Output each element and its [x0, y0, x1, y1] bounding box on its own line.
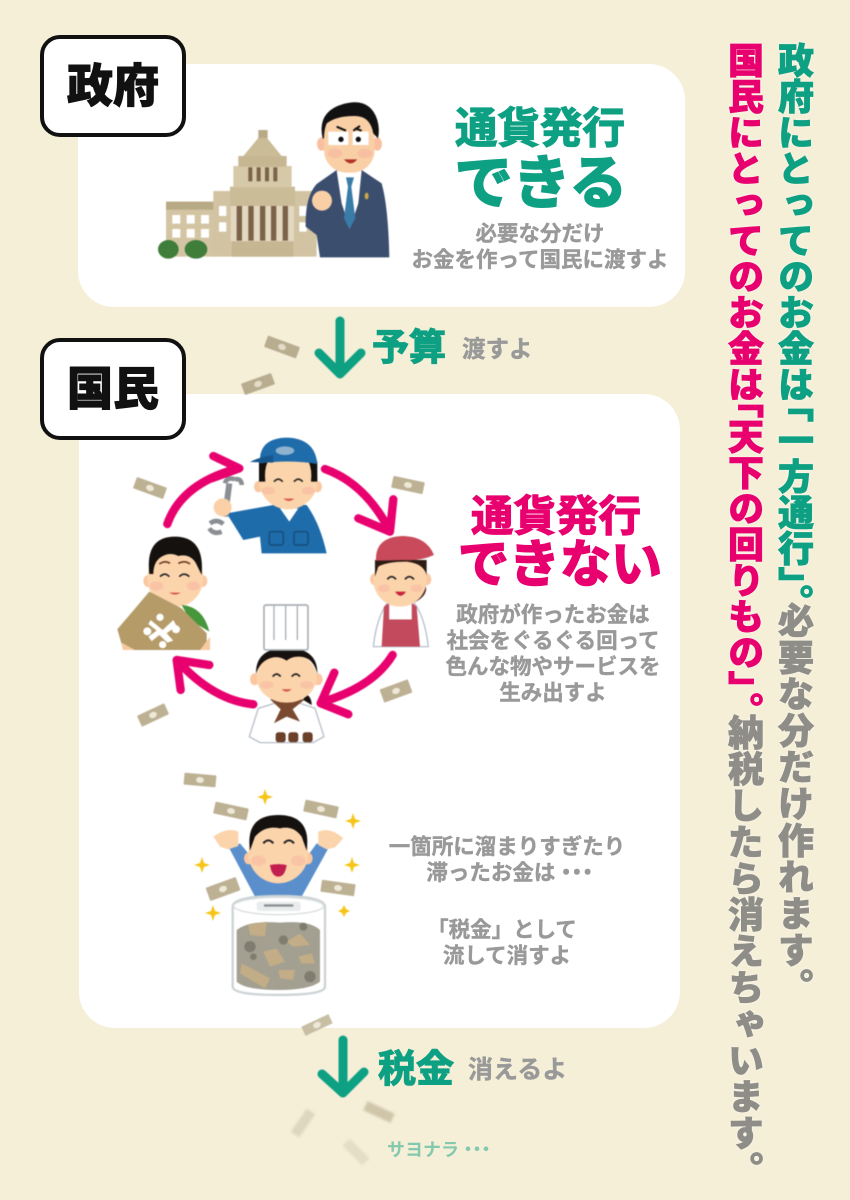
badge: government: 政府: [67, 60, 159, 112]
label: goodbye: サヨナラ・・・: [387, 1140, 486, 1160]
text: erase as tax: [427, 918, 577, 968]
icon: sparkles: [194, 789, 361, 921]
vertical text: citizens message: 国民にとってのお金は「 天下の回りもの 」。納税したら消えちゃいます。: [723, 42, 764, 1187]
text: government description: 必要な分だけ: [475, 222, 604, 246]
text: stagnant money: 滞ったお金は・・・: [426, 861, 588, 885]
text: erase as tax: 「税金」として: [427, 918, 577, 942]
vertical text: government message: 政府にとってのお金は「 一方通行 」。必要な分だけ作れます。: [773, 42, 814, 1005]
money bill: leaving panel: [301, 1014, 333, 1036]
text: government description: [412, 222, 668, 272]
label: hand over: 渡すよ: [462, 336, 532, 362]
icon: mechanic: [209, 438, 327, 553]
badge: citizens: 国民: [67, 363, 159, 415]
icon: politician: [306, 102, 389, 257]
text: money circulates: 社会をぐるぐる回って: [446, 629, 660, 653]
money bills: around jar: [184, 773, 356, 901]
label: tax: 税金: [378, 1049, 454, 1091]
money bills: falling from top: [241, 336, 300, 395]
label: budget: 予算: [372, 327, 446, 368]
heading: cannot: できない: [458, 536, 662, 593]
arrows: circular pink flow: [167, 456, 393, 714]
icon: pastry chef: [249, 605, 324, 743]
icon: parliament building: [158, 130, 317, 259]
arrow: tax down: [322, 1040, 364, 1093]
icon: farmer with sack: [117, 537, 210, 650]
icon: happy man in jar: [213, 815, 343, 897]
badge: citizens: [40, 338, 186, 440]
heading: can issue currency: 通貨発行: [455, 106, 625, 153]
arrow: budget down: [319, 321, 361, 374]
heading: cannot issue currency: 通貨発行: [471, 494, 641, 541]
panel: government: [78, 64, 685, 307]
icon: glass jar with money: [233, 896, 325, 995]
text: stagnant money: 一箇所に溜まりすぎたり: [389, 835, 625, 859]
text: money circulates: 政府が作ったお金は: [456, 603, 650, 627]
text: money circulates: 生み出すよ: [499, 681, 607, 705]
heading: can: できる: [455, 151, 627, 216]
text: stagnant money: [389, 835, 625, 885]
label: disappears: 消えるよ: [468, 1056, 567, 1084]
text: money circulates: [445, 602, 660, 705]
money bills: fading away: [291, 1101, 395, 1165]
icon: shop woman: [370, 536, 434, 647]
text: government description: お金を作って国民に渡すよ: [412, 248, 668, 272]
text: erase as tax: 流して消すよ: [443, 944, 571, 968]
money bills: around circle: [133, 476, 425, 727]
panel: citizens: [79, 394, 680, 1028]
badge: government: [40, 35, 186, 137]
text: money circulates: 色んな物やサービスを: [445, 655, 660, 679]
